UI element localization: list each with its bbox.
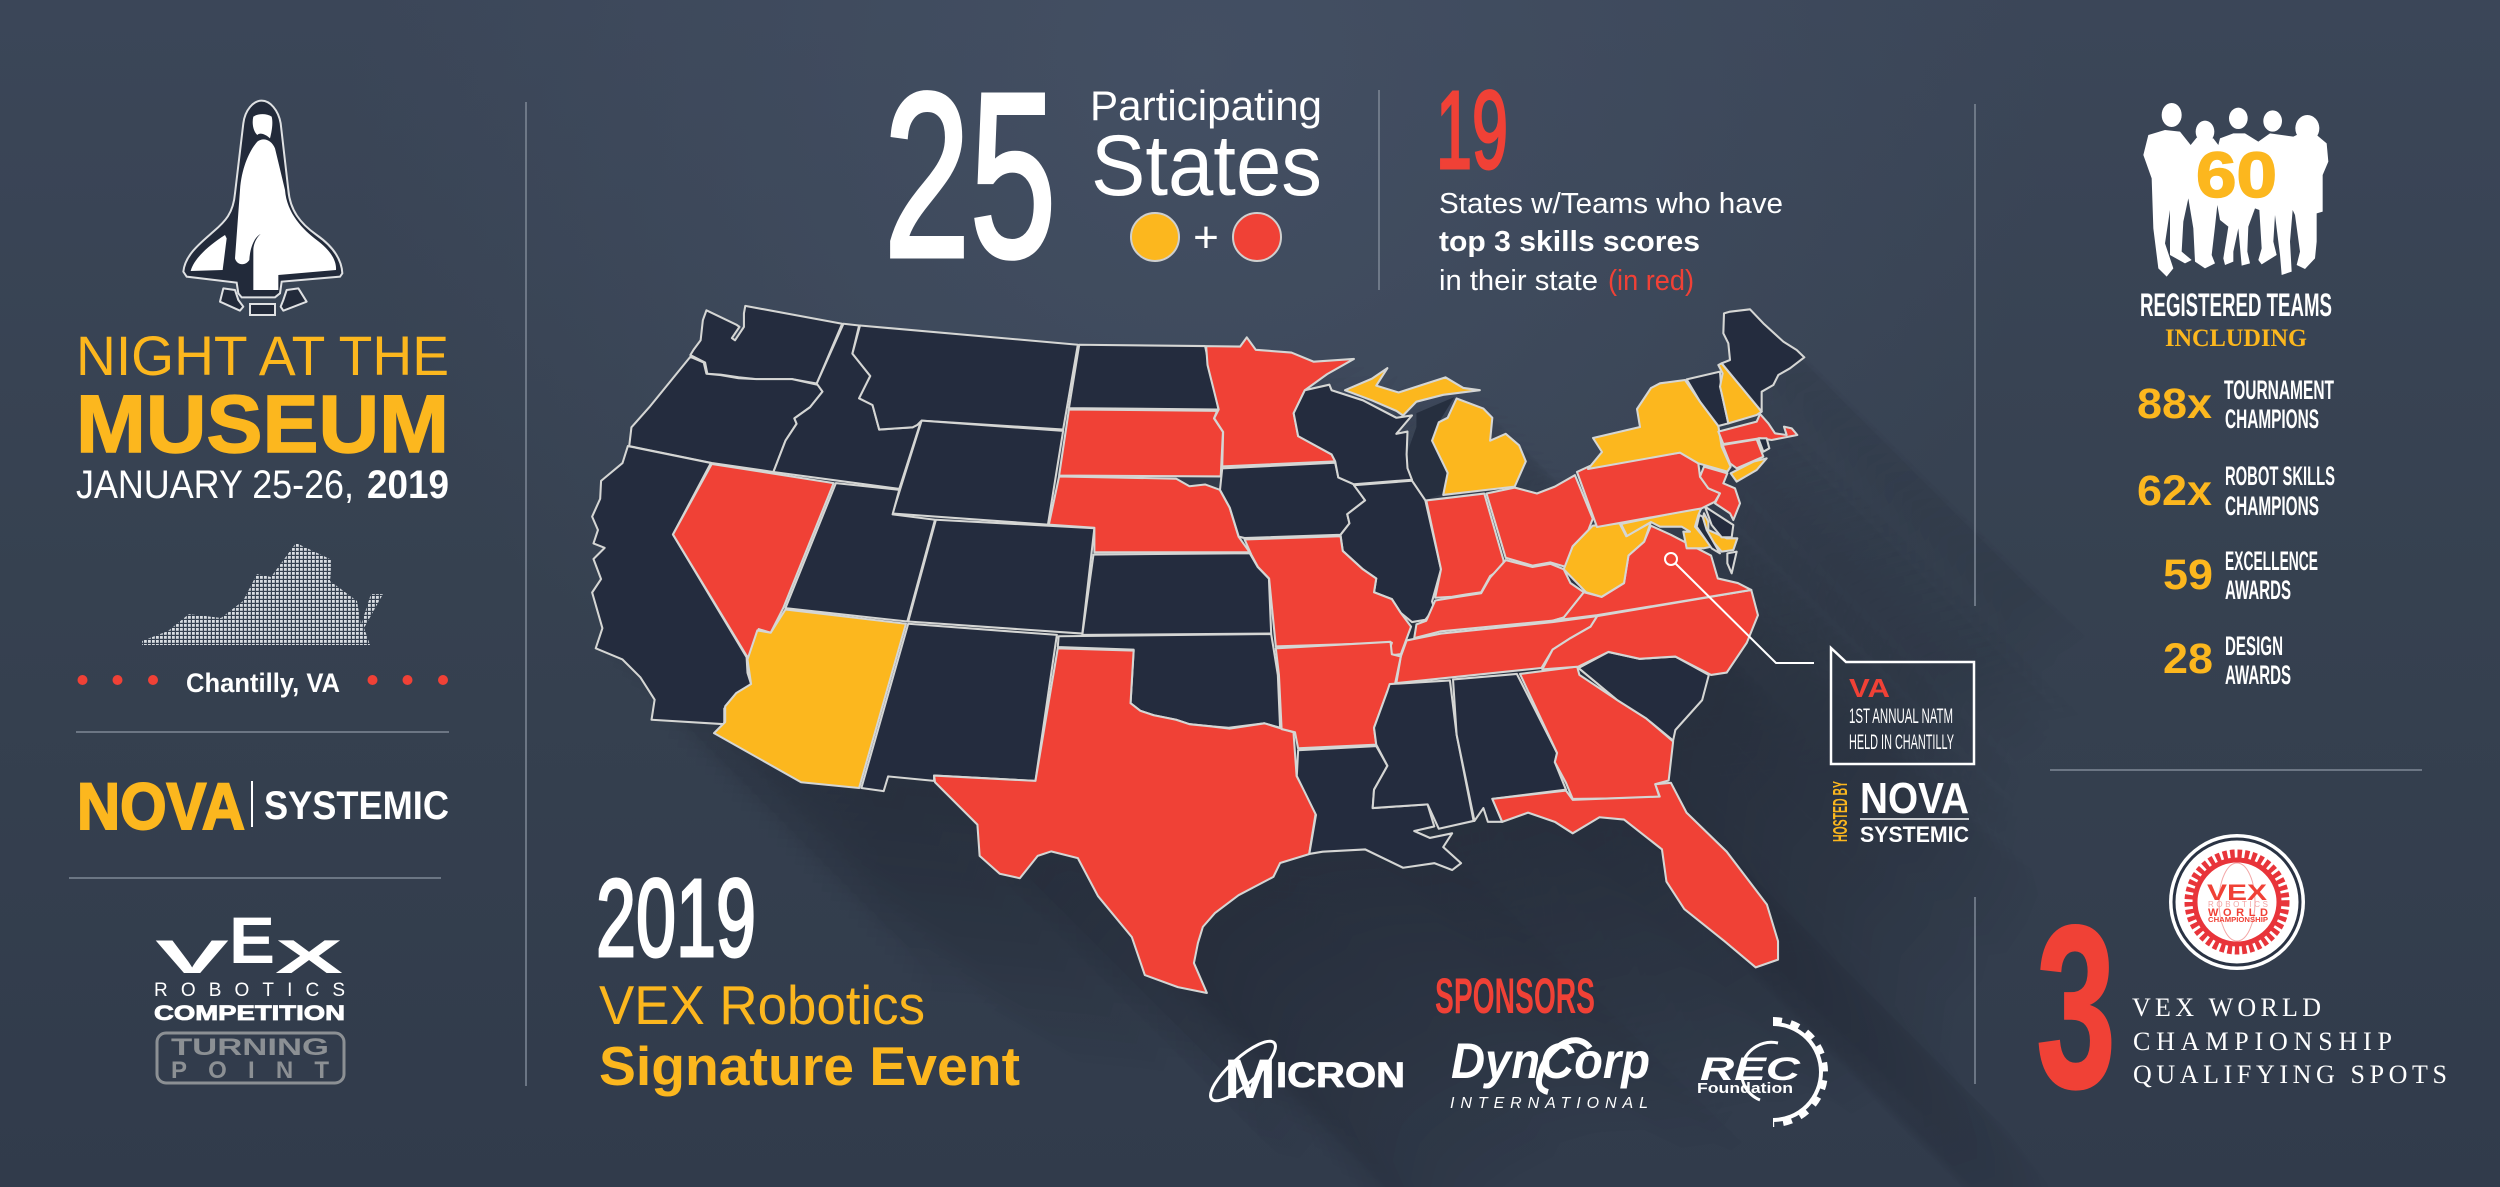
state: Alabama bbox=[1453, 674, 1566, 822]
logo: VEX Robotics Competition Turning Point: ROBOTICS bbox=[154, 980, 345, 1001]
state: Arkansas bbox=[1276, 642, 1401, 748]
stat row: 28 design awards: DESIGN bbox=[2225, 631, 2283, 661]
stat row: 28 design awards: AWARDS bbox=[2225, 660, 2291, 690]
badge: VEX World Championship: WORLD bbox=[2208, 907, 2268, 919]
title: Night at the Museum: NIGHT AT THE bbox=[76, 324, 449, 387]
legend: yellow plus red: + bbox=[1193, 213, 1219, 262]
Chesapeake Bay bbox=[1697, 515, 1720, 553]
state: Georgia bbox=[1520, 667, 1673, 799]
stat: 3 world championship spots bbox=[2036, 878, 2447, 1137]
Virginia eastern shore bbox=[1727, 552, 1737, 573]
icon: dotted Virginia shape bbox=[142, 543, 383, 645]
logo: Micron: ICRON bbox=[1276, 1056, 1405, 1095]
state: Long Island bbox=[1731, 458, 1767, 482]
icon: space shuttle bbox=[183, 101, 342, 315]
badge: VEX World Championship: ROBOTICS bbox=[2208, 900, 2268, 909]
state: South Dakota bbox=[1059, 409, 1223, 476]
state: Kentucky bbox=[1414, 560, 1584, 638]
state: Pennsylvania bbox=[1577, 453, 1720, 527]
state: West Virginia bbox=[1564, 522, 1651, 597]
stat row: 59 excellence awards: EXCELLENCE bbox=[2225, 546, 2318, 576]
stat: 19 states with top skills scores: top 3 skills scores bbox=[1439, 226, 1700, 258]
state: Montana bbox=[852, 326, 1078, 430]
event title: 2019 VEX Robotics Signature Event: 2019 bbox=[596, 857, 756, 980]
state: Vermont bbox=[1687, 372, 1728, 426]
divider: left column bbox=[525, 102, 527, 1086]
long map shadow bbox=[592, 306, 1804, 993]
stat row: 62x robot skills champions: 62x bbox=[2137, 467, 2212, 515]
Lake Michigan bbox=[1407, 397, 1454, 499]
badge: VEX World Championship: VEX bbox=[2207, 880, 2267, 905]
legend: yellow plus red bbox=[1131, 213, 1281, 262]
stat row: 59 excellence awards bbox=[2163, 546, 2318, 605]
stat: 3 world championship spots: QUALIFYING SPOTS bbox=[2133, 1060, 2447, 1089]
state: Rhode Island bbox=[1758, 438, 1769, 452]
state: Nebraska bbox=[1049, 476, 1250, 552]
state: Oklahoma bbox=[1058, 634, 1280, 728]
logo: DynCorp International: DynCorp bbox=[1451, 1033, 1650, 1089]
state: Nevada bbox=[673, 464, 834, 657]
stat: 3 world championship spots: VEX WORLD bbox=[2132, 993, 2321, 1022]
stat row: 59 excellence awards: AWARDS bbox=[2225, 575, 2291, 605]
icon: team silhouettes with 60 bbox=[2143, 103, 2328, 277]
state: Mississippi bbox=[1373, 680, 1474, 829]
stat: 3 world championship spots: 3 bbox=[2036, 878, 2116, 1137]
stat: 19 states with top skills scores: (in red) bbox=[1608, 265, 1694, 297]
state: New Hampshire bbox=[1718, 363, 1762, 423]
state: Wisconsin bbox=[1294, 385, 1412, 484]
stat row: 88x tournament champions bbox=[2137, 375, 2334, 434]
state: Florida bbox=[1492, 783, 1778, 967]
logo: VEX Robotics Competition Turning Point: TURNING bbox=[171, 1034, 329, 1061]
badge: VEX World Championship: CHAMPIONSHIP bbox=[2208, 917, 2268, 924]
location with red dots bbox=[78, 668, 448, 698]
logo: DynCorp International bbox=[1450, 1033, 1650, 1112]
state: Texas bbox=[934, 648, 1316, 993]
state: Michigan upper bbox=[1345, 368, 1480, 415]
state: California bbox=[592, 446, 751, 724]
callout state code: VA bbox=[1849, 673, 1890, 703]
state: Wyoming bbox=[893, 421, 1063, 525]
hosted by Nova Systemic: HOSTED BY bbox=[1830, 781, 1852, 842]
stat row: 59 excellence awards: 59 bbox=[2163, 551, 2213, 599]
state: Kansas bbox=[1082, 553, 1271, 635]
stat: 25 participating states: Participating bbox=[1090, 82, 1322, 129]
logo: VEX Robotics Competition Turning Point: E bbox=[229, 903, 275, 977]
state: New Mexico bbox=[861, 624, 1057, 791]
logo: VEX Robotics Competition Turning Point bbox=[154, 903, 345, 1084]
state: Maine bbox=[1722, 309, 1804, 412]
divider: top centre bbox=[1378, 90, 1380, 290]
stat: 19 states with top skills scores: States w/Teams who have bbox=[1439, 188, 1783, 220]
logo: REC Foundation bbox=[1697, 1020, 1825, 1124]
heading: registered teams bbox=[2140, 287, 2332, 352]
logo: Micron: M bbox=[1224, 1047, 1276, 1110]
badge: VEX World Championship bbox=[2169, 834, 2305, 970]
state: Minnesota bbox=[1206, 337, 1354, 466]
stat: 3 world championship spots: CHAMPIONSHIP bbox=[2133, 1027, 2392, 1056]
logo: REC Foundation: REC bbox=[1700, 1051, 1801, 1087]
logo: DynCorp International: INTERNATIONAL bbox=[1450, 1095, 1648, 1112]
logo: Nova Systemic bbox=[77, 769, 449, 843]
event title: 2019 VEX Robotics Signature Event: VEX Robotics bbox=[599, 974, 925, 1036]
stat row: 88x tournament champions: CHAMPIONS bbox=[2225, 404, 2319, 434]
divider: right column upper bbox=[1974, 104, 1976, 606]
state: Washington bbox=[690, 306, 842, 384]
state: Connecticut bbox=[1723, 439, 1763, 468]
stat row: 88x tournament champions: TOURNAMENT bbox=[2224, 375, 2334, 405]
state: South Carolina bbox=[1578, 652, 1709, 741]
state: Tennessee bbox=[1396, 616, 1597, 683]
logo: REC Foundation: Foundation bbox=[1697, 1080, 1793, 1097]
state: Indiana bbox=[1426, 494, 1503, 598]
logo: VEX Robotics Competition Turning Point: X bbox=[275, 930, 343, 983]
US map bbox=[592, 306, 1804, 993]
hosted by Nova Systemic: SYSTEMIC bbox=[1860, 822, 1969, 847]
state: Maryland eastern shore bbox=[1703, 513, 1737, 552]
event date: 2019 bbox=[367, 463, 449, 507]
state: New York bbox=[1588, 380, 1731, 472]
callout text line 1: 1ST ANNUAL NATM bbox=[1849, 705, 1953, 728]
event title: 2019 VEX Robotics Signature Event bbox=[596, 857, 1020, 1097]
state: Missouri bbox=[1245, 536, 1411, 656]
state: Arizona bbox=[714, 609, 906, 788]
stat: 19 states with top skills scores: 19 bbox=[1436, 69, 1508, 192]
title: Night at the Museum bbox=[76, 324, 449, 470]
location with red dots: Chantilly, VA bbox=[186, 668, 340, 698]
callout text line 2: HELD IN CHANTILLY bbox=[1849, 731, 1954, 754]
state: New Jersey bbox=[1700, 467, 1740, 520]
stat: 19 states with top skills scores: in their state bbox=[1439, 265, 1598, 297]
state: Oregon bbox=[629, 357, 823, 472]
logo: VEX Robotics Competition Turning Point: POINT bbox=[171, 1057, 329, 1084]
stat row: 62x robot skills champions bbox=[2137, 461, 2335, 521]
event date: JANUARY 25-26, bbox=[76, 463, 354, 507]
state: North Carolina bbox=[1542, 590, 1758, 675]
stat row: 62x robot skills champions: ROBOT SKILLS bbox=[2225, 461, 2335, 491]
VA callout leader line bbox=[1665, 553, 1814, 663]
state: Delaware bbox=[1705, 507, 1733, 537]
logo: VEX Robotics Competition Turning Point: V bbox=[155, 930, 231, 983]
stat row: 88x tournament champions: 88x bbox=[2137, 380, 2212, 428]
state: Michigan lower bbox=[1432, 398, 1526, 495]
logo: VEX Robotics Competition Turning Point: COMPETITION bbox=[154, 1002, 345, 1025]
heading: registered teams: INCLUDING bbox=[2165, 325, 2307, 352]
state: Illinois bbox=[1341, 481, 1441, 622]
state: Iowa bbox=[1220, 463, 1365, 538]
hosted by Nova Systemic: NOVA bbox=[1860, 774, 1969, 823]
state: Massachusetts bbox=[1718, 414, 1797, 444]
heading: registered teams: REGISTERED TEAMS bbox=[2140, 287, 2332, 323]
state: Idaho bbox=[773, 324, 921, 489]
stat: 25 participating states bbox=[884, 44, 1322, 306]
sponsors heading: SPONSORS bbox=[1435, 968, 1595, 1024]
stat: 25 participating states: States bbox=[1091, 118, 1322, 214]
stat row: 62x robot skills champions: CHAMPIONS bbox=[2225, 491, 2319, 521]
stat row: 28 design awards bbox=[2163, 631, 2291, 690]
title: Night at the Museum: MUSEUM bbox=[76, 379, 449, 470]
logo: Micron bbox=[1203, 1033, 1405, 1110]
icon: team silhouettes with 60: 60 bbox=[2196, 139, 2277, 211]
state: Virginia bbox=[1553, 526, 1751, 621]
hosted by Nova Systemic bbox=[1830, 774, 1969, 847]
logo: Nova Systemic: SYSTEMIC bbox=[264, 784, 449, 828]
stat: 19 states with top skills scores bbox=[1436, 69, 1783, 297]
divider: right column lower bbox=[1974, 897, 1976, 1084]
event title: 2019 VEX Robotics Signature Event: Signature Event bbox=[599, 1035, 1020, 1097]
state: Louisiana bbox=[1297, 746, 1461, 870]
state: Ohio bbox=[1487, 475, 1593, 567]
state: North Dakota bbox=[1069, 345, 1218, 409]
stat row: 28 design awards: 28 bbox=[2163, 635, 2213, 683]
state: Maryland west bbox=[1621, 507, 1712, 548]
logo: Nova Systemic: NOVA bbox=[77, 769, 245, 843]
stat: 25 participating states: 25 bbox=[884, 44, 1056, 306]
VA callout box bbox=[1831, 648, 1974, 764]
state: Colorado bbox=[908, 520, 1094, 634]
state: Utah bbox=[785, 483, 935, 622]
